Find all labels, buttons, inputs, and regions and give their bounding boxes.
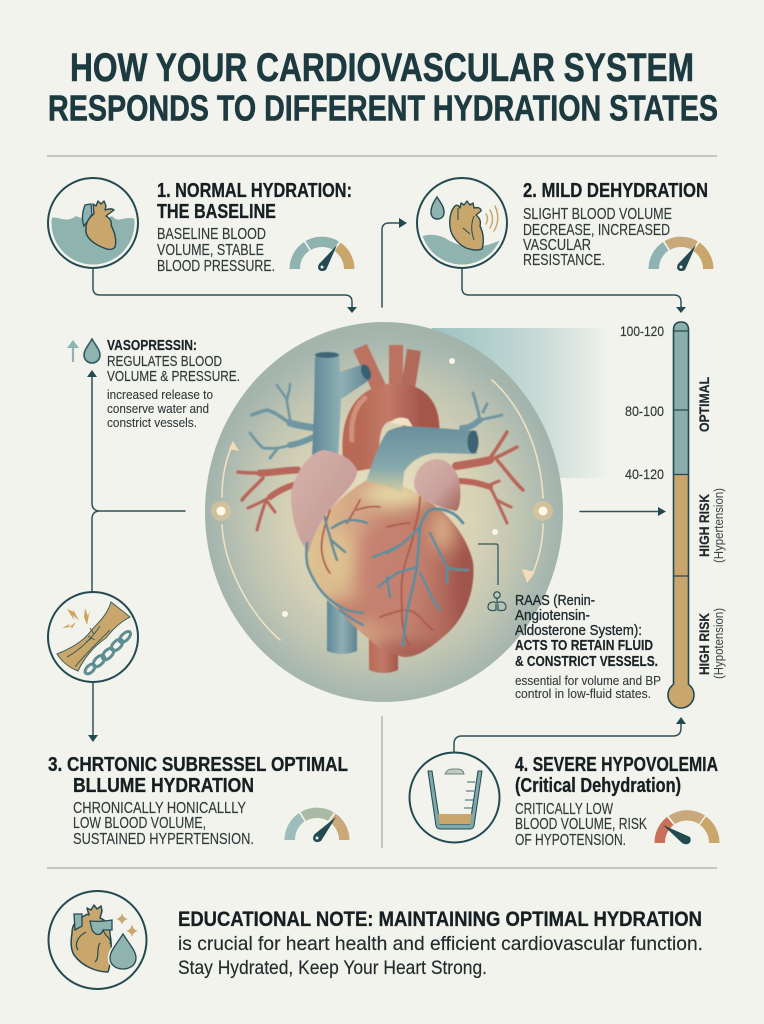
aorta (352, 345, 421, 470)
icon: beaker (410, 752, 500, 842)
arrow: state 1 to heart (93, 268, 352, 308)
title (48, 46, 718, 128)
background orb (205, 322, 563, 702)
text block: BLOOD VOLUME, RISK (515, 816, 648, 833)
callout: RAAS: RAAS (Renin- (515, 593, 595, 609)
heading: 1. NORMAL HYDRATION: (157, 180, 352, 202)
heading (48, 754, 348, 797)
scale values: 100-120 (620, 323, 664, 339)
text block (157, 226, 275, 275)
blue branches (250, 384, 502, 458)
text block: CHRONICALLY HONICALLLY (73, 800, 246, 817)
gauge (648, 237, 714, 271)
ventricle shading (319, 481, 477, 660)
heading: THE BASELINE (157, 201, 276, 223)
text block (73, 800, 254, 848)
callout: vasopressin: constrict vessels. (107, 415, 197, 430)
gauge (290, 237, 354, 271)
panel 3: chronic suboptimal hydration (48, 592, 350, 848)
callout: vasopressin (67, 338, 240, 430)
coronary vessels (306, 497, 468, 645)
scale labels: (Hypertension) (711, 488, 726, 563)
text block: RESISTANCE. (523, 252, 605, 269)
icon: heart and drop (48, 891, 146, 989)
scale labels: OPTIMAL (696, 377, 712, 432)
panel 1: normal hydration (48, 178, 354, 275)
text block: VASCULAR (523, 237, 591, 254)
scale labels: (Hypotension) (711, 608, 726, 679)
chart: blood pressure thermometer scale (620, 322, 726, 708)
connector bracket (478, 544, 498, 585)
heading: 3. CHRTONIC SUBRESSEL OPTIMAL (48, 754, 348, 776)
note text: Stay Hydrated, Keep Your Heart Strong. (178, 957, 487, 979)
chain links (83, 630, 132, 676)
callout: RAAS: Angiotensin- (515, 608, 590, 624)
callout: RAAS: Aldosterone System): (515, 623, 642, 639)
lower vessels (327, 600, 398, 673)
callout: vasopressin: VASOPRESSIN: (107, 338, 197, 354)
callout: RAAS: ACTS TO RETAIN FLUID (515, 638, 653, 654)
callout: vasopressin: REGULATES BLOOD (107, 354, 222, 370)
text block (523, 206, 672, 269)
text block: OF HYPOTENSION. (515, 832, 626, 849)
icon: up arrow and drop (67, 339, 100, 363)
panel 4: severe hypovolemia (410, 752, 720, 849)
pulmonary artery (366, 426, 477, 494)
circulation arcs (222, 380, 543, 640)
heading: BLLUME HYDRATION (73, 775, 254, 797)
note text: EDUCATIONAL NOTE: MAINTAINING OPTIMAL HYDRATION (178, 908, 702, 931)
scale values: 80-100 (625, 403, 664, 419)
text block: DECREASE, INCREASED (523, 222, 670, 239)
left atrium (414, 459, 460, 511)
callout: RAAS: essential for volume and BP (515, 673, 661, 688)
callout: RAAS (478, 544, 661, 701)
scale labels: HIGH RISK (696, 613, 712, 675)
red branches (238, 432, 523, 530)
callout: vasopressin: conserve water and (107, 401, 209, 416)
callout: vasopressin: VOLUME & PRESSURE. (107, 369, 240, 385)
callout: RAAS: control in low-fluid states. (515, 686, 651, 701)
text block: LOW BLOOD VOLUME, (73, 815, 206, 832)
gauge (284, 808, 350, 842)
arrow: heart to vasopressin and state 3 (92, 375, 185, 592)
text block: SLIGHT BLOOD VOLUME (523, 206, 672, 223)
superior vena cava (312, 352, 373, 460)
heading: 2. MILD DEHYDRATION (523, 180, 708, 202)
arrow: state 2 to scale (462, 268, 681, 308)
arrow: icon to state 3 (92, 682, 94, 736)
right atrium (291, 450, 357, 552)
panel 2: mild dehydration (417, 178, 714, 271)
scale labels: HIGH RISK (696, 494, 712, 557)
heading: (Critical Dehydration) (515, 775, 681, 797)
panel: glow behind heart (432, 328, 612, 478)
icon: vessel and chain (48, 592, 138, 682)
arrow: state 4 to scale (454, 723, 681, 752)
heading (157, 180, 352, 223)
heading (515, 754, 718, 797)
panel: educational note (48, 891, 703, 989)
icon: heart with drop (417, 178, 507, 268)
text block (515, 801, 648, 849)
ventricles (307, 480, 473, 657)
text block: VOLUME, STABLE (157, 242, 264, 259)
icon: heart in water (48, 178, 138, 268)
icon: kidney system (488, 592, 506, 611)
callout: RAAS: & CONSTRICT VESSELS. (515, 654, 658, 670)
note text: is crucial for heart health and efficient cardiovascular function. (178, 933, 703, 955)
gauge (654, 810, 720, 844)
text block: CRITICALLY LOW (515, 801, 613, 818)
central heart illustration (205, 322, 563, 702)
glow dots (211, 358, 553, 617)
text block: SUSTAINED HYPERTENSION. (73, 831, 254, 848)
scale labels (696, 377, 726, 679)
scale values: 40-120 (625, 466, 664, 482)
text block: BLOOD PRESSURE. (157, 258, 275, 275)
callout: vasopressin: increased release to (107, 387, 213, 402)
arrow: heart to state 2 (382, 223, 400, 307)
arrow: heart to scale (580, 510, 660, 512)
scale values (620, 323, 664, 482)
text block: BASELINE BLOOD (157, 226, 266, 243)
note text (178, 908, 703, 979)
